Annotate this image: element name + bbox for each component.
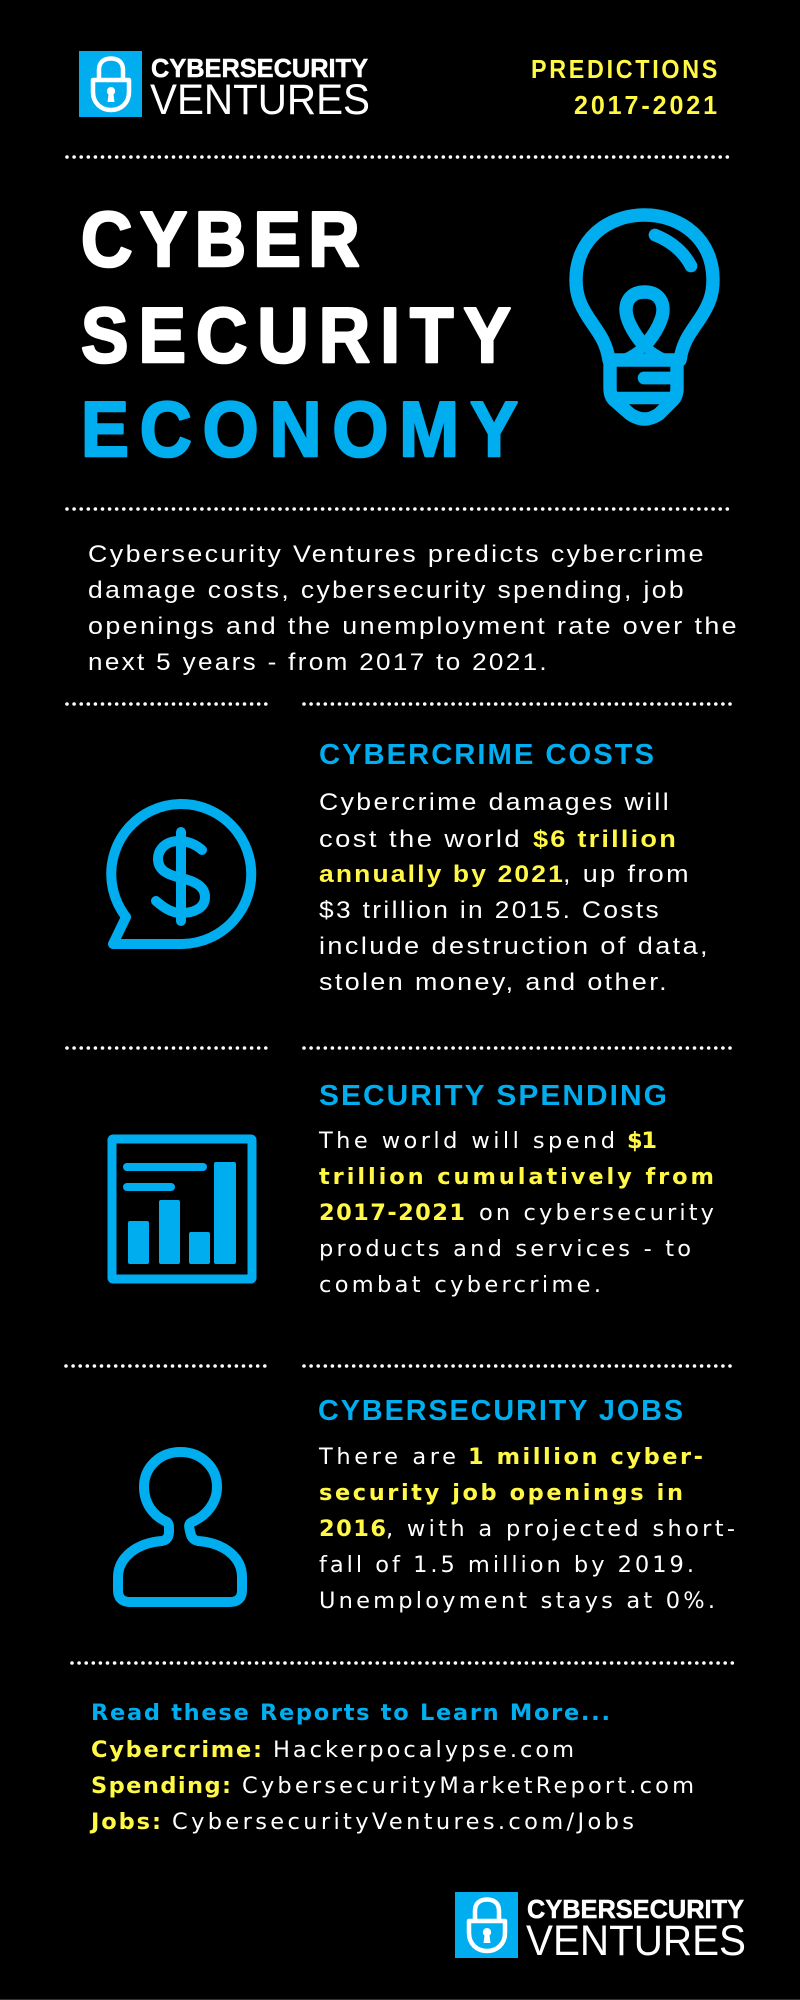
text: security spending body: trillion cumulatively from [319, 1164, 714, 1190]
panel: cybersecurity jobs [318, 1395, 735, 1614]
logo: header Cybersecurity Ventures [79, 51, 370, 124]
text: cybercrime costs body [319, 789, 710, 996]
icon: light bulb [576, 215, 713, 419]
panel: cybercrime costs [319, 739, 710, 996]
text: security spending body: $1 [627, 1128, 657, 1154]
intro text: openings and the unemployment rate over the [88, 613, 739, 640]
text: jobs report link: CybersecurityVentures.com/Jobs [172, 1809, 634, 1835]
heading: read these reports: Read these Reports to Learn More... [91, 1700, 610, 1726]
text: jobs report link: Jobs: [89, 1809, 161, 1835]
intro text: Cybersecurity Ventures predicts cybercrime [88, 541, 706, 568]
text: cybercrime costs body: include destruction of data, [319, 933, 710, 960]
text: cybersecurity jobs body: Unemployment stays at 0%. [319, 1588, 715, 1614]
text: cybercrime costs body: $6 trillion [533, 826, 678, 853]
logo: header Cybersecurity Ventures: VENTURES [150, 76, 370, 124]
text: cybercrime costs body: $3 trillion in 2015. Costs [319, 897, 661, 924]
icon: bar chart report [112, 1139, 252, 1279]
text: security spending body: The world will spend [318, 1128, 615, 1154]
logo: footer Cybersecurity Ventures: VENTURES [526, 1917, 746, 1965]
heading: predictions date range: PREDICTIONS [531, 54, 720, 84]
heading: cybersecurity jobs: CYBERSECURITY JOBS [318, 1395, 685, 1427]
panel: reports list [89, 1700, 694, 1835]
text: cybersecurity jobs body [318, 1444, 735, 1614]
text: cybersecurity jobs body: There are [318, 1444, 456, 1470]
intro text [88, 541, 739, 676]
logo: footer Cybersecurity Ventures [455, 1892, 746, 1965]
logo: footer Cybersecurity Ventures: CYBERSECURITY [527, 1894, 744, 1924]
panel: security spending [318, 1080, 714, 1298]
heading: cybercrime costs: CYBERCRIME COSTS [319, 739, 656, 771]
icon: person [118, 1452, 242, 1602]
heading: security spending: SECURITY SPENDING [319, 1080, 669, 1112]
text: cybersecurity jobs body: , with a projected short- [386, 1516, 735, 1542]
icon: dollar speech bubble [111, 804, 251, 944]
logo: header Cybersecurity Ventures: CYBERSECURITY [151, 53, 368, 83]
heading: predictions date range [531, 54, 720, 120]
text: security spending body: products and services - to [319, 1236, 691, 1262]
title: CYBER [81, 195, 367, 283]
text: cybercrime report link: Cybercrime: [91, 1737, 262, 1763]
text: cybercrime report link: Hackerpocalypse.com [273, 1737, 574, 1763]
text: cybersecurity jobs body: 2016 [319, 1516, 386, 1542]
text: security spending body: combat cybercrime. [319, 1272, 601, 1298]
text: cybercrime costs body: annually by 2021 [319, 861, 565, 888]
text: cybersecurity jobs body: fall of 1.5 million by 2019. [319, 1552, 694, 1578]
title: ECONOMY [81, 385, 529, 473]
title [81, 195, 529, 473]
heading: predictions date range: 2017-2021 [574, 90, 720, 120]
text: security spending body: on cybersecurity [479, 1200, 714, 1226]
text: spending report link: CybersecurityMarketReport.com [242, 1773, 694, 1799]
text: cybercrime costs body: , up from [563, 861, 691, 888]
text: cybersecurity jobs body: 1 million cyber- [468, 1444, 703, 1470]
text: security spending body: 2017-2021 [319, 1200, 465, 1226]
text: cybersecurity jobs body: security job openings in [319, 1480, 683, 1506]
intro text: damage costs, cybersecurity spending, job [88, 577, 686, 604]
text: cybercrime report link [91, 1737, 574, 1763]
text: cybercrime costs body: Cybercrime damages will [319, 789, 671, 816]
text: security spending body [318, 1128, 714, 1298]
text: spending report link: Spending: [91, 1773, 231, 1799]
text: cybercrime costs body: stolen money, and other. [319, 969, 669, 996]
intro text: next 5 years - from 2017 to 2021. [88, 649, 549, 676]
title: SECURITY [81, 291, 521, 379]
text: cybercrime costs body: cost the world [319, 826, 522, 853]
